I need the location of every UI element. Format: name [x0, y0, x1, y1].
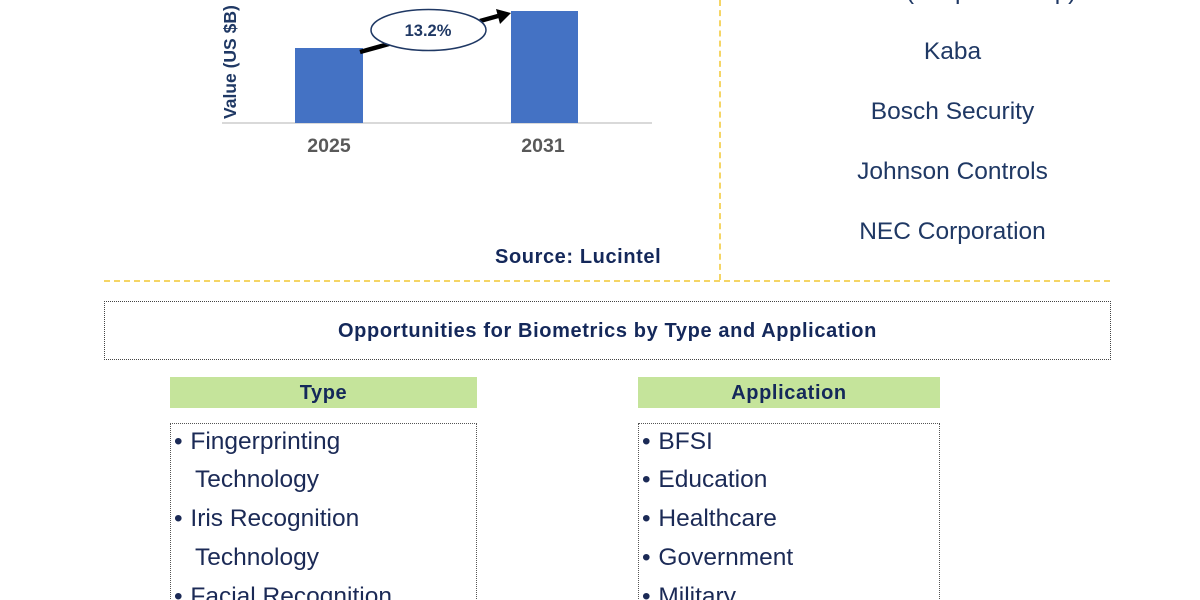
CAGR ellipse: 13.2% — [405, 22, 452, 40]
label 2025: 2025 — [307, 135, 351, 157]
type list — [170, 423, 477, 600]
company: Kaba: Kaba — [924, 38, 981, 65]
horizontal divider — [104, 280, 1110, 282]
opportunities heading: Opportunities for Biometrics by Type and Application — [338, 320, 877, 342]
type header: Type — [300, 382, 347, 404]
company list — [829, 0, 1076, 245]
vertical divider — [719, 0, 721, 280]
company: Johnson Controls: Johnson Controls — [857, 158, 1048, 185]
CAGR ellipse — [371, 10, 486, 50]
application header — [638, 377, 940, 408]
y axis label: Value (US $B) — [220, 5, 240, 119]
application list: • Healthcare — [642, 505, 777, 532]
application items: • BFSI — [642, 428, 713, 455]
opportunities heading — [104, 301, 1111, 360]
type items: • Fingerprinting — [174, 428, 340, 455]
label 2031: 2031 — [521, 135, 565, 157]
type list: Technology — [195, 466, 319, 493]
company: NEC Corporation: NEC Corporation — [859, 218, 1046, 245]
type header — [170, 377, 477, 408]
type list: Technology — [195, 544, 319, 571]
application list: • Government — [642, 544, 793, 571]
application list — [638, 423, 940, 600]
bar 2031 — [511, 11, 578, 123]
application list: • Education — [642, 466, 767, 493]
source: Source: Lucintel — [495, 246, 661, 268]
bar 2025 — [295, 48, 363, 123]
company: Bosch Security: Bosch Security — [871, 98, 1034, 125]
growth arrow — [360, 9, 511, 52]
application header: Application — [731, 382, 847, 404]
axis line — [222, 122, 652, 124]
type list: • Iris Recognition — [174, 505, 359, 532]
bar chart — [220, 5, 661, 268]
